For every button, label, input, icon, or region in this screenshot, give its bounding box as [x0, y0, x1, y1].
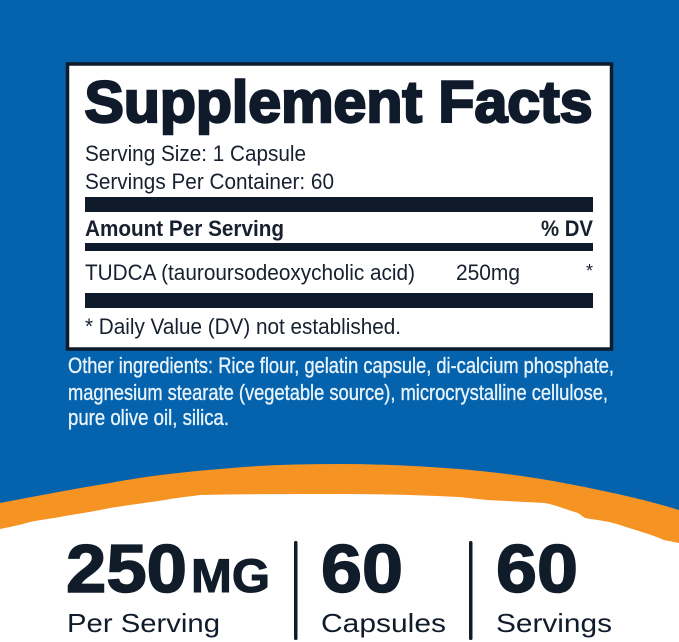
white lower area — [0, 494, 679, 642]
stat: 250mg per serving — [66, 531, 270, 638]
stat: 60 capsules: 60 — [321, 531, 403, 607]
medium rule — [85, 243, 593, 251]
text: daily value note: * Daily Value (DV) not established. — [85, 314, 401, 339]
panel: supplement facts label — [68, 64, 612, 349]
text: servings per container: Servings Per Container: 60 — [85, 169, 334, 194]
orange curved band — [0, 464, 679, 642]
text block: other ingredients: pure olive oil, silica. — [68, 405, 229, 430]
divider one — [294, 541, 298, 640]
stat: 250mg per serving: 250 — [66, 531, 187, 607]
text: TUDCA ingredient: TUDCA (tauroursodeoxycholic acid) — [85, 260, 415, 285]
thick rule bottom — [85, 293, 593, 308]
text: serving size: Serving Size: 1 Capsule — [85, 141, 306, 166]
stat: 60 capsules — [321, 531, 446, 638]
stat: 60 servings — [496, 531, 612, 638]
stat: 60 servings: 60 — [496, 531, 578, 607]
stat: 60 servings: Servings — [496, 608, 612, 638]
stat: 60 capsules: Capsules — [321, 608, 446, 638]
text: 250mg amount: 250mg — [456, 260, 520, 285]
stat: 250mg per serving: MG — [191, 549, 270, 602]
heading: Supplement Facts: Supplement Facts — [84, 70, 592, 135]
text: asterisk: * — [586, 261, 593, 281]
divider two — [469, 541, 472, 640]
text: amount per serving: Amount Per Serving — [85, 216, 284, 241]
thick rule top — [85, 197, 593, 212]
stat: 250mg per serving: Per Serving — [67, 608, 220, 638]
text: percent daily value: % DV — [541, 216, 593, 241]
text block: other ingredients — [68, 353, 614, 430]
